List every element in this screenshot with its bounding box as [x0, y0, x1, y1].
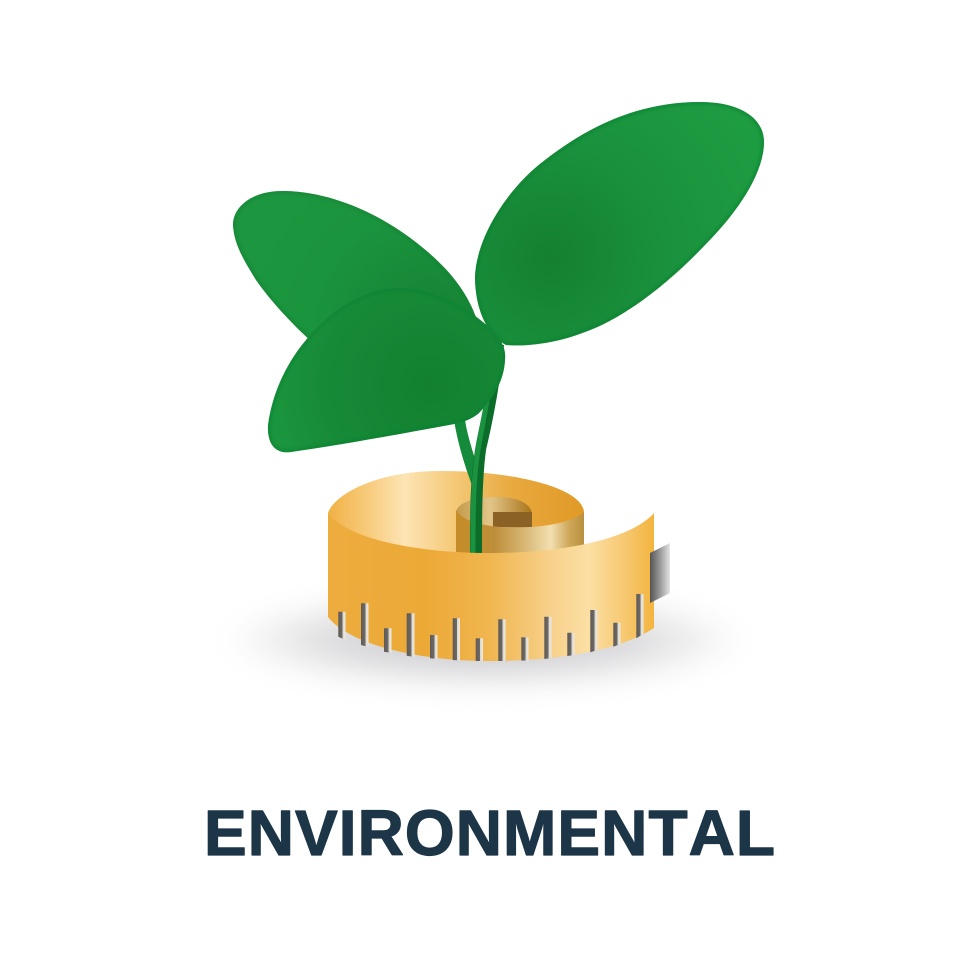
tape front band [328, 513, 654, 661]
tape back wall [328, 471, 584, 560]
front leaf [268, 288, 506, 452]
inner coil [456, 497, 584, 560]
ground shadow [223, 590, 747, 690]
infographic canvas [208, 102, 774, 856]
right leaf [470, 95, 770, 355]
sprout stems [454, 345, 504, 553]
left back leaf [233, 191, 476, 338]
title: ENVIRONMENTAL [204, 797, 775, 869]
icon: measuring tape [328, 345, 670, 661]
metal tab [650, 543, 670, 603]
tape tick marks [338, 594, 644, 661]
icon: sprout leaves [225, 95, 770, 458]
